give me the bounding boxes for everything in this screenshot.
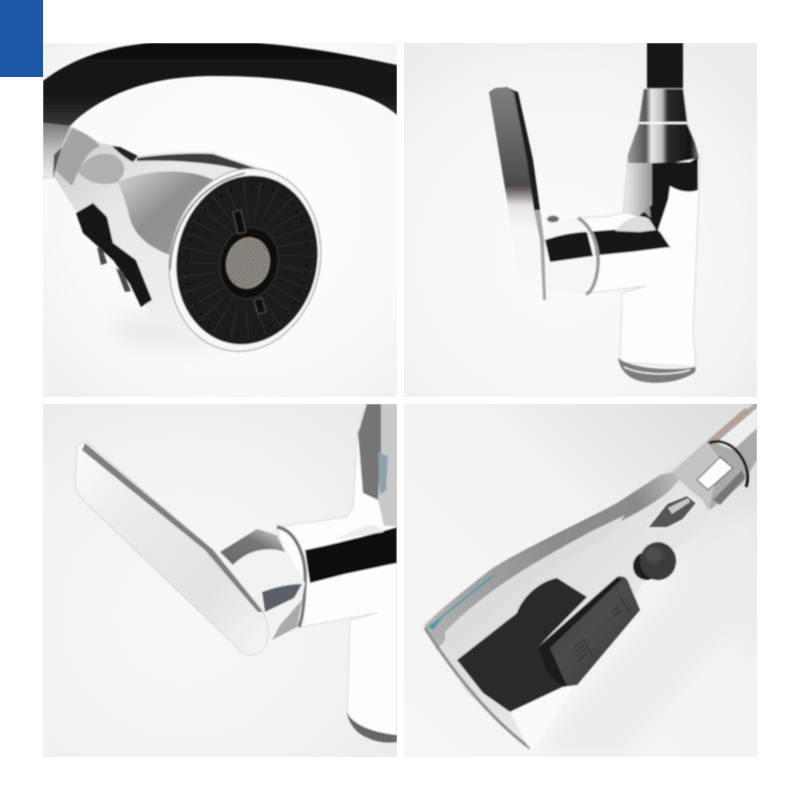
dark band on spout arm xyxy=(305,527,397,583)
lever handle xyxy=(75,442,268,655)
screw xyxy=(547,216,559,222)
spray head body xyxy=(423,443,720,750)
chrome ring xyxy=(277,527,305,627)
chrome foot xyxy=(347,712,397,743)
panel: faucet side view xyxy=(404,43,757,397)
panel: spray head face xyxy=(43,43,397,397)
icon: spray mode xyxy=(612,597,630,616)
chrome foot xyxy=(618,358,696,383)
panel: lever handle close-up xyxy=(43,404,397,757)
black hose xyxy=(647,43,683,91)
lower white reflection xyxy=(510,683,577,750)
faucet body xyxy=(277,404,397,742)
handle collar xyxy=(220,536,306,612)
radial spokes xyxy=(190,194,304,326)
icon: shower mode xyxy=(572,637,592,661)
spray nozzle dots xyxy=(185,184,308,336)
black switch with shower and spray icons xyxy=(538,576,640,687)
blue corner block xyxy=(0,0,43,77)
chrome ring xyxy=(578,218,598,294)
side oval reflection xyxy=(647,495,697,528)
neck lower-left reflection xyxy=(623,160,652,218)
upper silver reflection xyxy=(425,468,690,650)
chrome tube segment xyxy=(43,123,70,178)
black knob xyxy=(633,542,676,580)
black hose xyxy=(43,43,397,126)
handle collar xyxy=(544,218,596,293)
shadow under spray head xyxy=(118,314,205,348)
slots xyxy=(233,210,266,314)
body reflections xyxy=(56,128,100,186)
chrome tube xyxy=(700,403,757,510)
teal reflection xyxy=(428,573,498,630)
centre ring xyxy=(219,226,279,300)
dark band on spout arm xyxy=(592,228,670,256)
panel: spray head side view xyxy=(404,403,757,757)
mesh aerator xyxy=(224,236,272,290)
dark spray face xyxy=(175,174,319,346)
neck black reflection xyxy=(640,157,698,248)
face outer chrome rim xyxy=(168,167,322,353)
collar highlights and window xyxy=(672,443,745,512)
black trigger button xyxy=(76,203,152,307)
upper neck collar xyxy=(639,89,687,122)
neck grey reflection xyxy=(358,404,381,500)
chrome spray head body xyxy=(43,126,260,308)
neck chrome reflection xyxy=(628,124,699,163)
mouth edge xyxy=(425,628,530,748)
faucet body xyxy=(578,89,700,367)
shadow below spray head xyxy=(540,500,757,757)
dark reflection xyxy=(457,578,587,712)
lever handle xyxy=(489,87,546,302)
black o-ring xyxy=(709,441,748,487)
